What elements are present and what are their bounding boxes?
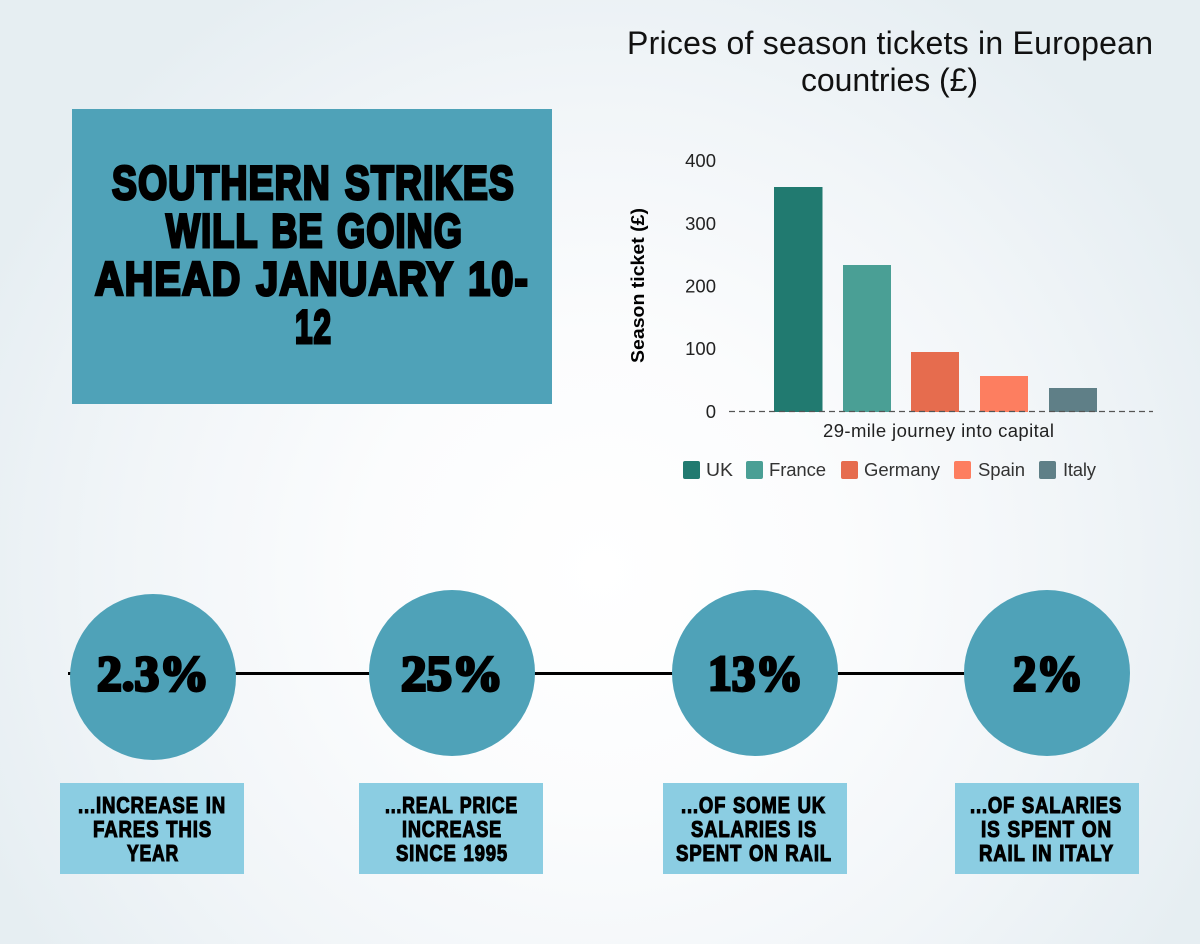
bar: UK xyxy=(774,187,822,412)
y axis tick labels: 0 xyxy=(706,401,716,422)
heading: southern strikes: WILL BE GOING xyxy=(166,204,463,257)
caption: real price increase xyxy=(359,783,543,874)
legend xyxy=(683,459,1097,480)
heading: southern strikes xyxy=(95,156,529,353)
caption: Italy salaries xyxy=(955,783,1139,874)
y axis tick labels: 400 xyxy=(685,150,716,171)
stat: 13%: 13% xyxy=(708,645,803,701)
bar: Italy xyxy=(1049,388,1097,412)
caption: increase in fares: FARES THIS xyxy=(93,816,212,842)
legend: Italy xyxy=(1063,459,1097,480)
caption: UK salaries: SPENT ON RAIL xyxy=(676,840,832,866)
y axis tick labels: 200 xyxy=(685,276,716,296)
stat: 25%: 25% xyxy=(401,645,503,701)
heading: southern strikes: 12 xyxy=(295,300,332,353)
caption: Italy salaries: RAIL IN ITALY xyxy=(979,840,1114,866)
caption: Italy salaries: ...OF SALARIES xyxy=(970,792,1122,818)
legend: UK xyxy=(706,459,734,480)
caption: increase in fares: ...INCREASE IN xyxy=(78,792,226,818)
stat: 2.3%: 2.3% xyxy=(97,645,209,701)
stat: 2%: 2% xyxy=(1013,645,1083,701)
stat: 25% xyxy=(369,590,535,756)
chart title: countries (£) xyxy=(801,62,978,98)
chart title: Prices of season tickets in European xyxy=(627,25,1153,61)
y axis tick labels: 300 xyxy=(685,213,716,234)
chart title xyxy=(627,25,1153,98)
stat: 13% xyxy=(672,590,838,756)
bar: Germany xyxy=(911,352,959,412)
caption: increase in fares: YEAR xyxy=(127,840,179,866)
stat: 2.3% xyxy=(70,594,236,760)
y axis tick labels: 100 xyxy=(685,338,716,359)
panel: headline xyxy=(72,109,552,404)
caption: real price increase: ...REAL PRICE xyxy=(385,792,518,818)
connector line xyxy=(68,672,1048,675)
heading: southern strikes: AHEAD JANUARY 10- xyxy=(95,252,529,305)
caption: UK salaries: ...OF SOME UK xyxy=(681,792,826,818)
caption: UK salaries xyxy=(663,783,847,874)
legend: Germany xyxy=(864,459,941,480)
caption: Italy salaries: IS SPENT ON xyxy=(981,816,1112,842)
bar: Spain xyxy=(980,376,1028,412)
heading: southern strikes: SOUTHERN STRIKES xyxy=(112,156,515,209)
caption: increase in fares xyxy=(60,783,244,874)
caption: real price increase: SINCE 1995 xyxy=(396,840,508,866)
legend: Spain xyxy=(978,459,1025,480)
stat: 2% xyxy=(964,590,1130,756)
caption: UK salaries: SALARIES IS xyxy=(691,816,817,842)
legend: France xyxy=(769,459,826,480)
x axis title: 29-mile journey into capital xyxy=(823,420,1054,441)
y axis tick labels xyxy=(685,150,716,422)
caption: real price increase: INCREASE xyxy=(402,816,502,842)
y axis title: Season ticket (£) xyxy=(627,208,648,363)
bar: France xyxy=(843,265,891,412)
bar chart: season ticket prices xyxy=(627,150,1153,480)
